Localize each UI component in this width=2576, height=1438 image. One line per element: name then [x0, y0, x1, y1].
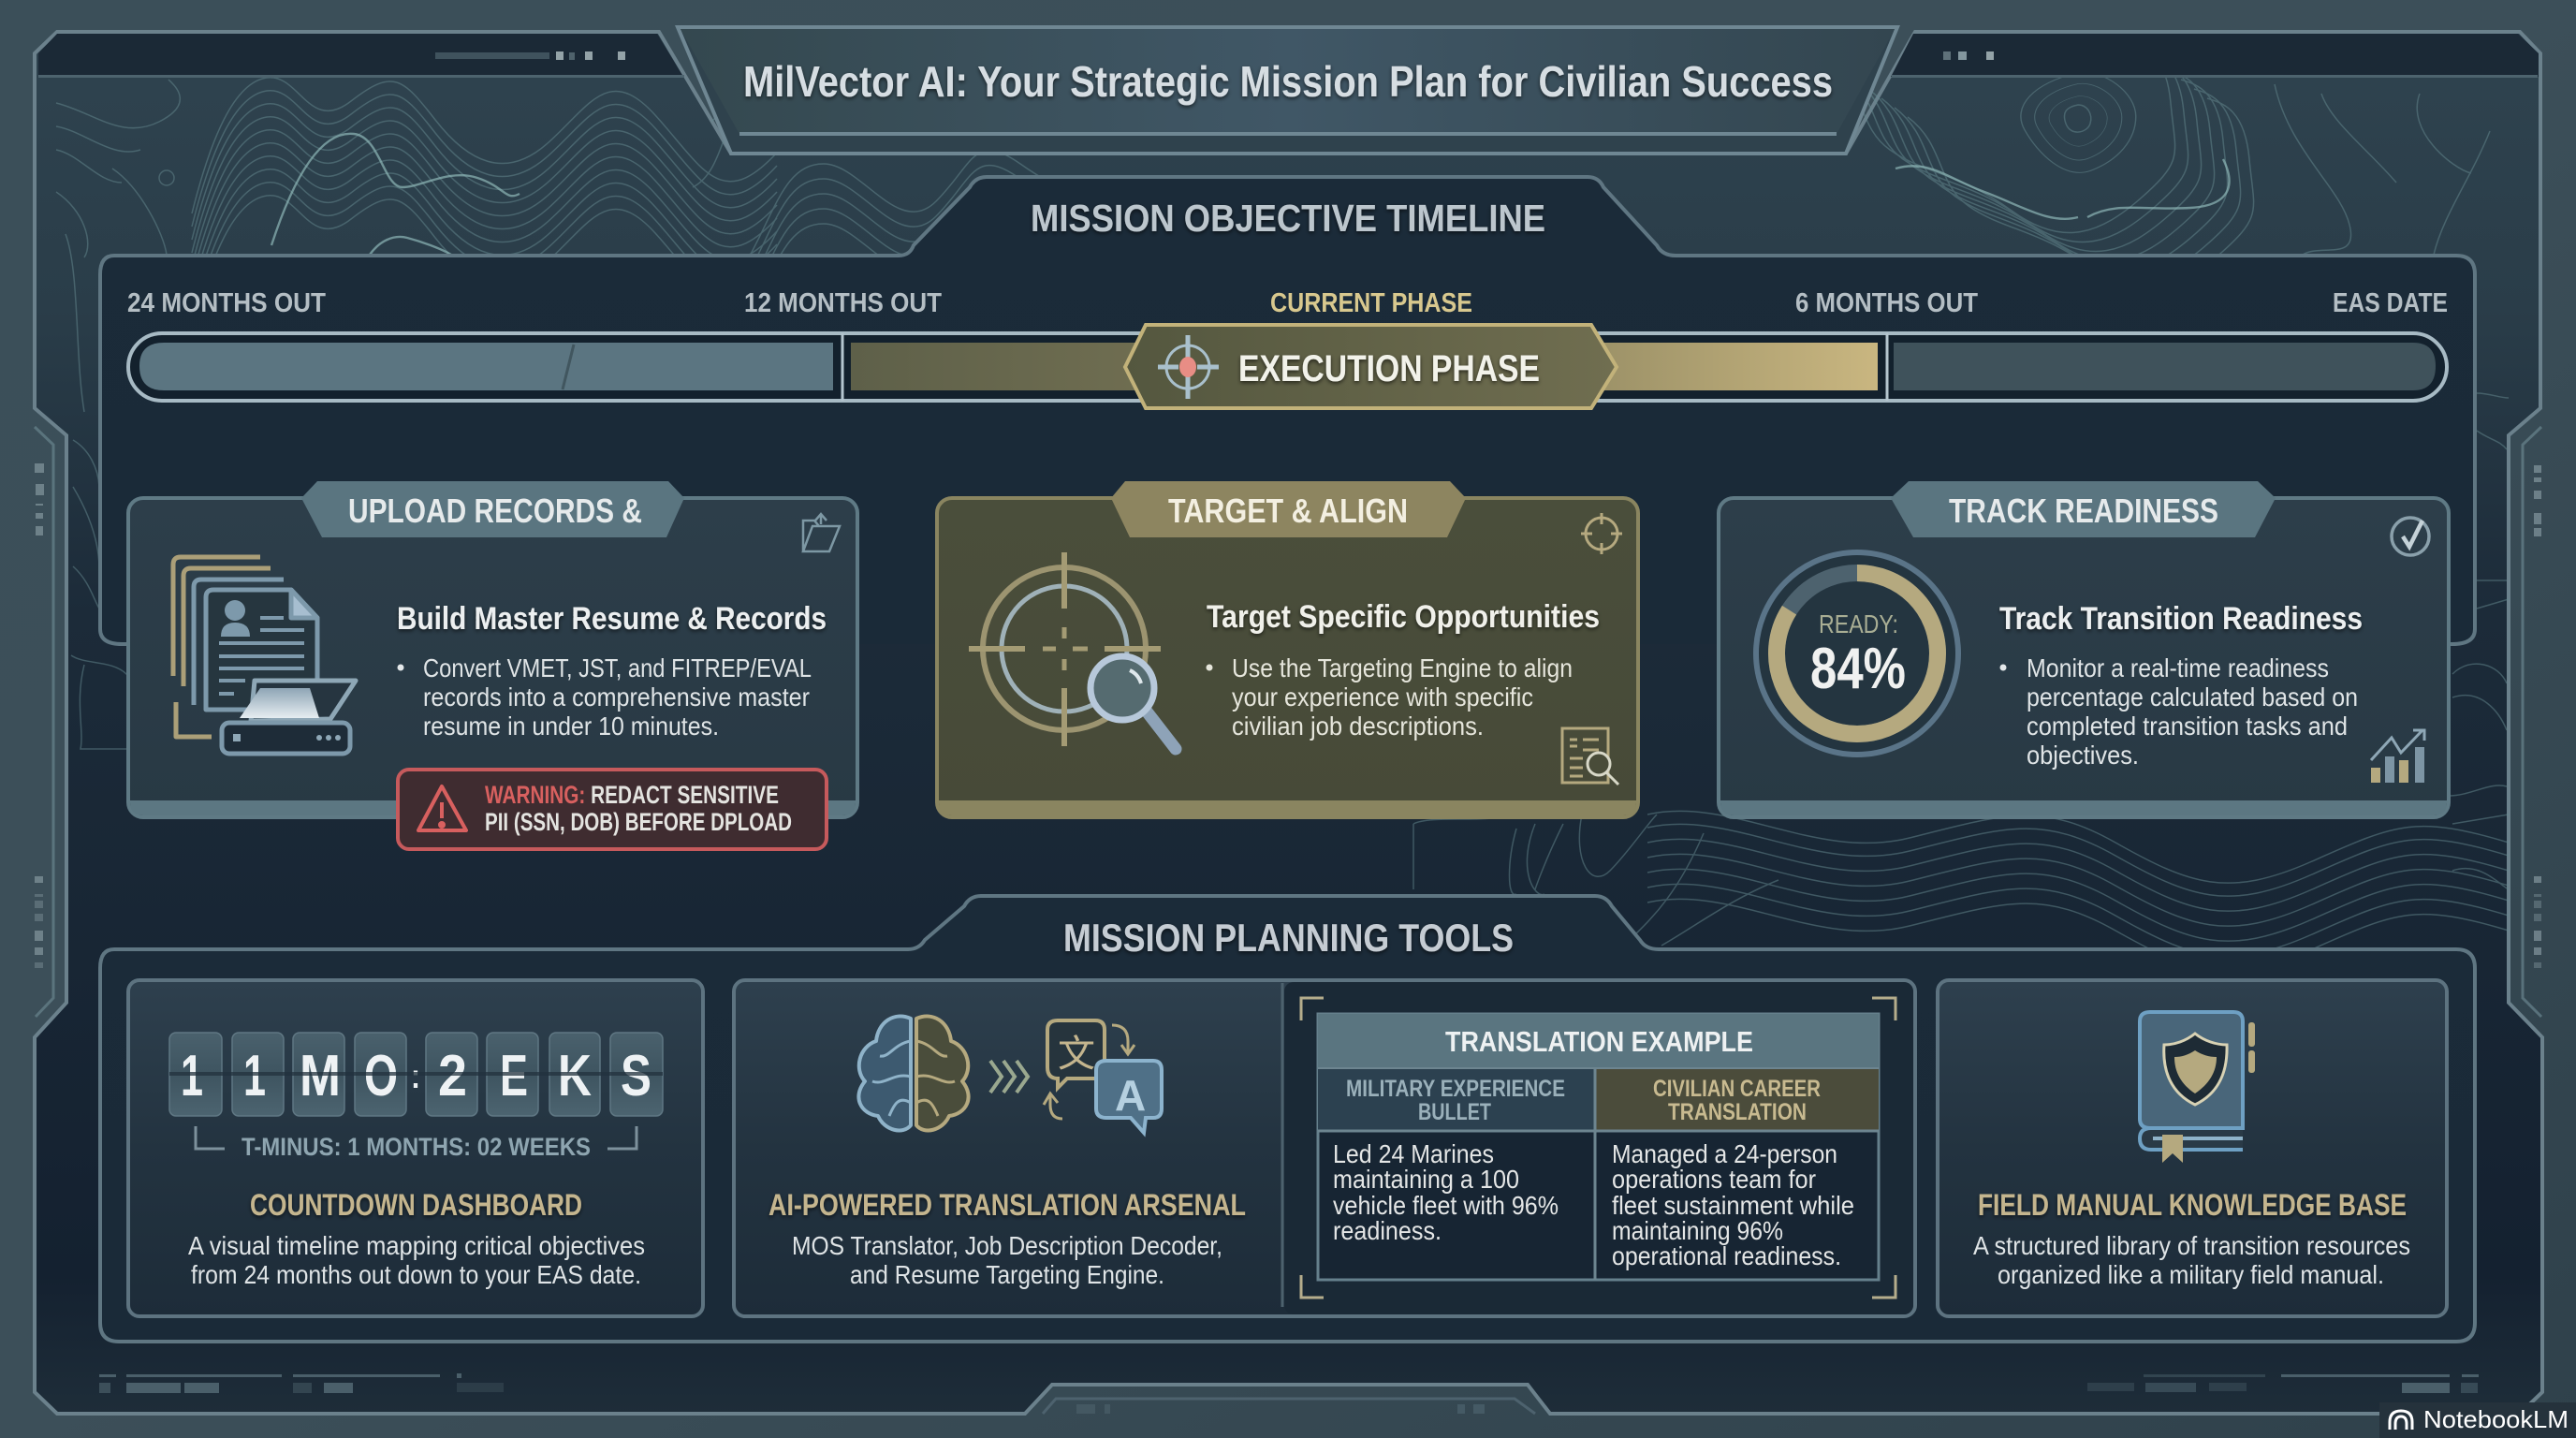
tool description	[188, 1231, 645, 1289]
flip countdown: 1	[181, 1044, 203, 1108]
translation example table: Managed a 24-person	[1612, 1139, 1837, 1168]
milestone labels	[127, 288, 2448, 318]
tool card: countdown dashboard	[128, 980, 703, 1316]
card bullet text: Use the Targeting Engine to align	[1232, 653, 1573, 682]
callout: warning: WARNING: REDACT SENSITIVE	[485, 781, 779, 809]
icon: target with magnifier	[969, 552, 1176, 749]
milestone labels: 6 MONTHS OUT	[1795, 288, 1978, 318]
icon: translation bubbles: 文	[1058, 1034, 1095, 1075]
tool description: A visual timeline mapping critical objectives	[188, 1231, 645, 1260]
card tab	[1111, 481, 1466, 537]
milestone labels: 24 MONTHS OUT	[127, 288, 326, 318]
tool title: AI-POWERED TRANSLATION ARSENAL	[768, 1188, 1246, 1222]
translation example table: maintaining 96%	[1612, 1216, 1783, 1245]
card: target and align	[937, 481, 1638, 817]
tool card: AI-powered translation arsenal	[734, 980, 1915, 1316]
panel heading: MISSION OBJECTIVE TIMELINE	[1031, 197, 1545, 240]
translation example table: operational readiness.	[1612, 1241, 1841, 1270]
translation example table: fleet sustainment while	[1612, 1191, 1854, 1220]
icon: small target	[1581, 513, 1622, 554]
panel: mission objective timeline	[100, 177, 2475, 644]
topographic contour background	[56, 42, 2509, 971]
icon: warning triangle	[418, 786, 466, 830]
icon: document search	[1562, 728, 1618, 785]
card: track readiness	[1719, 481, 2449, 817]
flip countdown: M	[300, 1044, 341, 1108]
icon: notebook arcs	[2390, 1411, 2412, 1430]
icon: translation bubbles	[1044, 1020, 1162, 1133]
callout: warning: PII (SSN, DOB) BEFORE DPLOAD	[485, 808, 792, 836]
flip countdown: 1	[243, 1044, 266, 1108]
title: MilVector AI: Your Strategic Mission Plan for Civilian Success	[743, 57, 1833, 106]
translation example table: readiness.	[1333, 1216, 1442, 1245]
milestone labels: CURRENT PHASE	[1270, 288, 1472, 318]
translation example table: TRANSLATION	[1668, 1099, 1807, 1125]
icon: chevrons	[990, 1061, 1028, 1093]
card tab	[1891, 481, 2276, 537]
tool description: A structured library of transition resources	[1973, 1231, 2410, 1260]
flip countdown: O	[364, 1044, 398, 1108]
tool description: from 24 months out down to your EAS date.	[191, 1260, 641, 1289]
flip countdown	[169, 1033, 663, 1116]
translation example table: operations team for	[1612, 1165, 1816, 1194]
icon: documents and scanner	[173, 557, 356, 754]
icon: crosshair	[1158, 335, 1219, 399]
milestone labels: 12 MONTHS OUT	[744, 288, 942, 318]
translation example table: vehicle fleet with 96%	[1333, 1191, 1559, 1220]
icon: brain	[858, 1016, 969, 1130]
title banner	[678, 27, 1897, 154]
card tab: TARGET & ALIGN	[1168, 492, 1408, 530]
card bullet text: Monitor a real-time readiness	[2027, 653, 2329, 682]
card heading: Build Master Resume & Records	[397, 601, 827, 637]
flip countdown: E	[500, 1044, 528, 1108]
translation example table: CIVILIAN CAREER	[1653, 1076, 1821, 1102]
flip countdown: S	[621, 1044, 651, 1108]
card heading: Track Transition Readiness	[1999, 601, 2363, 637]
icon: translation bubbles: A	[1115, 1071, 1146, 1120]
tool description: and Resume Targeting Engine.	[850, 1260, 1164, 1289]
tool title: FIELD MANUAL KNOWLEDGE BASE	[1978, 1188, 2407, 1222]
notebooklm watermark	[2379, 1402, 2576, 1438]
card bullet text: records into a comprehensive master	[423, 682, 810, 712]
card bullet text: percentage calculated based on	[2027, 682, 2358, 712]
tool title: COUNTDOWN DASHBOARD	[250, 1188, 582, 1222]
flip countdown: K	[558, 1044, 592, 1108]
panel heading: MISSION PLANNING TOOLS	[1063, 916, 1514, 960]
panel: mission planning tools	[100, 896, 2475, 1342]
tool description: organized like a military field manual.	[1998, 1260, 2384, 1289]
card: upload records	[128, 481, 857, 849]
card tab	[301, 481, 684, 537]
translation example table: BULLET	[1418, 1099, 1491, 1125]
card bullet text: objectives.	[2027, 741, 2139, 770]
callout: warning	[398, 770, 827, 849]
readiness gauge 84%: 84%	[1810, 637, 1906, 701]
card bullet text	[397, 653, 812, 741]
translation example table: TRANSLATION EXAMPLE	[1445, 1025, 1753, 1058]
card bullet text: Convert VMET, JST, and FITREP/EVAL	[423, 653, 812, 682]
side ticks	[35, 427, 2541, 1017]
translation example table: Led 24 Marines	[1333, 1139, 1494, 1168]
card bullet text: completed transition tasks and	[2027, 712, 2348, 741]
t-minus label: T-MINUS: 1 MONTHS: 02 WEEKS	[242, 1133, 591, 1161]
card bullet text: your experience with specific	[1232, 682, 1533, 712]
tool description	[792, 1231, 1222, 1289]
translation example table	[1301, 998, 1895, 1298]
icon: growth chart	[2371, 730, 2424, 783]
card tab: UPLOAD RECORDS &	[348, 492, 642, 530]
tool card: field manual knowledge base	[1938, 980, 2447, 1316]
tool description	[1973, 1231, 2410, 1289]
top strip: right status bar	[1891, 34, 2539, 78]
card bullet text: resume in under 10 minutes.	[423, 712, 719, 741]
icon: check circle	[2392, 518, 2429, 555]
readiness gauge 84%	[1756, 552, 1958, 755]
flip countdown: :	[411, 1057, 420, 1095]
execution phase badge: EXECUTION PHASE	[1238, 348, 1540, 389]
icon: field manual book	[2140, 1012, 2255, 1163]
flip countdown: 2	[438, 1044, 467, 1108]
timeline track	[128, 333, 2447, 401]
card bullet text: civilian job descriptions.	[1232, 712, 1484, 741]
card tab: TRACK READINESS	[1949, 492, 2218, 530]
notebooklm watermark: NotebookLM	[2423, 1405, 2569, 1433]
card heading: Target Specific Opportunities	[1207, 599, 1600, 635]
translation example table: maintaining a 100	[1333, 1165, 1519, 1194]
readiness gauge 84%: READY:	[1819, 609, 1898, 638]
milestone labels: EAS DATE	[2333, 288, 2448, 318]
icon: folder	[803, 514, 840, 551]
card bullet text	[1999, 653, 2358, 770]
execution phase badge	[1125, 325, 1617, 408]
card bullet text	[1206, 653, 1573, 741]
top strip: left status bar	[38, 34, 684, 78]
tool description: MOS Translator, Job Description Decoder,	[792, 1231, 1222, 1260]
bottom status bar details	[99, 1373, 2479, 1414]
translation example table: MILITARY EXPERIENCE	[1346, 1076, 1565, 1102]
